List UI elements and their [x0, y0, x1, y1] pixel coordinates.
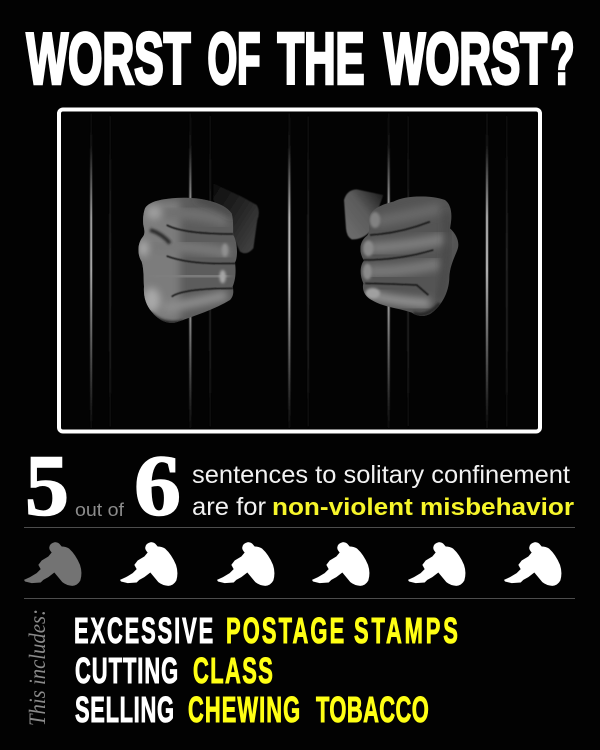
figure white 1	[120, 542, 177, 586]
line one: sentences to solitary confinement	[192, 461, 570, 489]
prison bars	[90, 113, 508, 428]
title	[26, 20, 574, 100]
item: cutting class: CUTTING	[75, 651, 178, 691]
item: selling chewing tobacco	[75, 690, 429, 730]
pictogram row: 1 of 6 grey, 5 of 6 white	[24, 542, 561, 586]
side label: this includes: This includes:	[25, 609, 50, 726]
item: cutting class: CLASS	[193, 651, 273, 691]
item: cutting class	[75, 651, 273, 691]
statistic: 5 out of 6	[25, 436, 181, 534]
item: excessive postage stamps: STAMPS	[354, 611, 458, 651]
figure grey	[24, 542, 81, 586]
photo frame	[59, 110, 540, 432]
title: WORST	[26, 20, 191, 100]
item: selling chewing tobacco: TOBACCO	[316, 690, 429, 730]
photo panel: hands gripping prison bars	[59, 110, 540, 432]
number 6: 6	[134, 436, 181, 534]
number 5: 5	[25, 436, 69, 534]
title: THE	[278, 20, 364, 100]
item: excessive postage stamps	[74, 611, 458, 651]
item: excessive postage stamps: EXCESSIVE	[74, 611, 213, 651]
item: excessive postage stamps: POSTAGE	[226, 611, 344, 651]
statistic description	[192, 461, 574, 521]
item: selling chewing tobacco: CHEWING	[188, 690, 300, 730]
title: ?	[550, 20, 574, 100]
list of misbehaviors	[74, 611, 458, 730]
title: OF	[208, 20, 260, 100]
right hand	[344, 189, 463, 323]
figure white 3	[312, 542, 369, 586]
left hand	[133, 183, 259, 327]
item: selling chewing tobacco: SELLING	[75, 690, 174, 730]
figure white 5	[504, 542, 561, 586]
line two lead-in: are for	[192, 493, 266, 521]
figure white 2	[217, 542, 274, 586]
figure white 4	[408, 542, 465, 586]
out of label: out of	[75, 500, 125, 520]
line two highlight: non-violent misbehavior	[272, 494, 574, 521]
